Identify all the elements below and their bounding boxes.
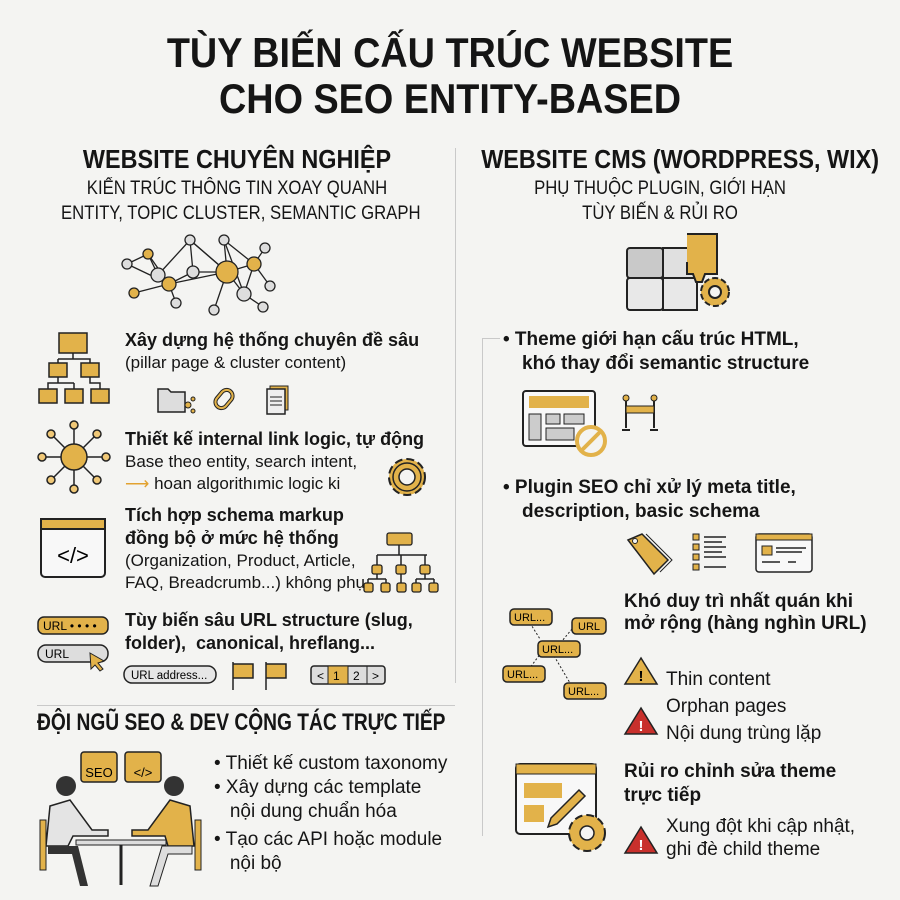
left subtitle: KIẾN TRÚC THÔNG TIN XOAY QUANH [87, 178, 387, 199]
right item 1: khó thay đổi semantic structure [522, 353, 809, 374]
icons: tag list window [626, 533, 813, 576]
team bullets [214, 753, 448, 874]
divider [455, 148, 456, 683]
right item 3: Nội dung trùng lặp [666, 723, 821, 744]
item 2 [37, 420, 426, 496]
text: Tùy biến sâu URL structure (slug, [125, 610, 413, 630]
text: Thiết kế internal link logic, tự động [125, 429, 424, 449]
text: Tích hợp schema markup [125, 505, 344, 525]
right item 1 [503, 329, 809, 457]
item 3: (Organization, Product, Article, [125, 551, 356, 570]
team bullets: nội dung chuẩn hóa [230, 801, 397, 822]
text: Xây dựng hệ thống chuyên đề sâu [125, 330, 419, 350]
icon: gear [388, 458, 426, 496]
right item 4: trực tiếp [624, 785, 701, 806]
icon: folder tree [38, 332, 110, 404]
icon: link hub [37, 420, 111, 494]
warning: ! [638, 837, 644, 854]
item 2: Base theo entity, search intent, [125, 452, 357, 471]
right item 4: ghi đè child theme [666, 839, 820, 860]
icon: URL bars: URL • • • • [43, 619, 97, 633]
right item 3: Thin content [666, 669, 771, 690]
right subtitle [534, 177, 786, 224]
icon: puzzle [626, 233, 730, 311]
item 3: FAQ, Breadcrumb...) không phụ [125, 573, 365, 592]
icons: url flags pager: 1 [333, 669, 340, 683]
icons: folder link doc [157, 386, 288, 415]
warnings: ! [638, 668, 644, 685]
right item 4 [515, 761, 855, 860]
icon: team illustration: SEO [85, 765, 113, 780]
item 2: ⟶ hoan algorithımic logic ki [125, 474, 340, 493]
team bullets: • Tạo các API hoặc module [214, 829, 442, 850]
right item 3: mở rộng (hàng nghìn URL) [624, 613, 867, 634]
panel: left [37, 140, 455, 706]
text: Khó duy trì nhất quán khi [624, 591, 853, 612]
right item 2: description, basic schema [522, 501, 760, 522]
right item 2 [503, 477, 813, 576]
icons: url flags pager: URL address... [131, 670, 207, 682]
icons: url flags pager: > [372, 669, 379, 683]
icon: URL bars: URL [45, 647, 69, 661]
left subtitle: ENTITY, TOPIC CLUSTER, SEMANTIC GRAPH [61, 203, 421, 224]
title: CHO SEO ENTITY-BASED [219, 75, 681, 122]
icon: URL network: URL [578, 621, 600, 633]
warnings: ! [638, 718, 644, 735]
team bullets: • Xây dựng các template [214, 777, 421, 798]
team bullets: • Thiết kế custom taxonomy [214, 753, 447, 774]
text: • Theme giới hạn cấu trúc HTML, [503, 329, 799, 350]
icons: url flags pager: 2 [353, 669, 360, 683]
right item 3: Orphan pages [666, 696, 786, 717]
text: Rủi ro chỉnh sửa theme [624, 761, 836, 782]
left heading: WEBSITE CHUYÊN NGHIỆP [83, 144, 391, 174]
warnings [624, 656, 658, 735]
icon: URL network: URL... [507, 669, 538, 681]
right subtitle: TÙY BIẾN & RỦI RO [582, 203, 738, 224]
icon: URL network: URL... [514, 612, 545, 624]
icon: team illustration [40, 751, 202, 886]
icon: edit window gear [515, 763, 606, 852]
icon: code window [40, 518, 106, 578]
icon: team illustration: </> [134, 765, 152, 780]
item 1 [38, 330, 419, 415]
item 1: (pillar page & cluster content) [125, 353, 346, 372]
item 4: folder), canonical, hreflang... [125, 633, 375, 653]
warning [624, 826, 658, 854]
right item 3 [502, 591, 867, 744]
item 4 [37, 610, 413, 690]
item 3: đồng bộ ở mức hệ thống [125, 528, 339, 548]
icon: code window: </> [57, 543, 89, 568]
title: TÙY BIẾN CẤU TRÚC WEBSITE [167, 29, 733, 76]
team bullets: nội bộ [230, 853, 282, 874]
right heading: WEBSITE CMS (WORDPRESS, WIX) [481, 144, 879, 174]
icons: url flags pager [123, 662, 386, 690]
icon: layout blocked [522, 390, 658, 457]
bracket line right [482, 338, 483, 836]
icon: hierarchy [363, 532, 439, 593]
right subtitle: PHỤ THUỘC PLUGIN, GIỚI HẠN [534, 178, 786, 199]
icon: URL bars [37, 616, 109, 672]
right item 4: Xung đột khi cập nhật, [666, 816, 855, 837]
title [167, 29, 733, 122]
icon: URL network: URL... [568, 686, 599, 698]
icon: URL network [502, 608, 607, 700]
icon: URL network: URL... [542, 644, 573, 656]
item 3 [40, 505, 439, 593]
left subtitle [61, 177, 421, 224]
text: • Plugin SEO chỉ xử lý meta title, [503, 477, 796, 498]
team heading: ĐỘI NGŨ SEO & DEV CỘNG TÁC TRỰC TIẾP [37, 709, 445, 736]
icons: url flags pager: < [317, 669, 324, 683]
